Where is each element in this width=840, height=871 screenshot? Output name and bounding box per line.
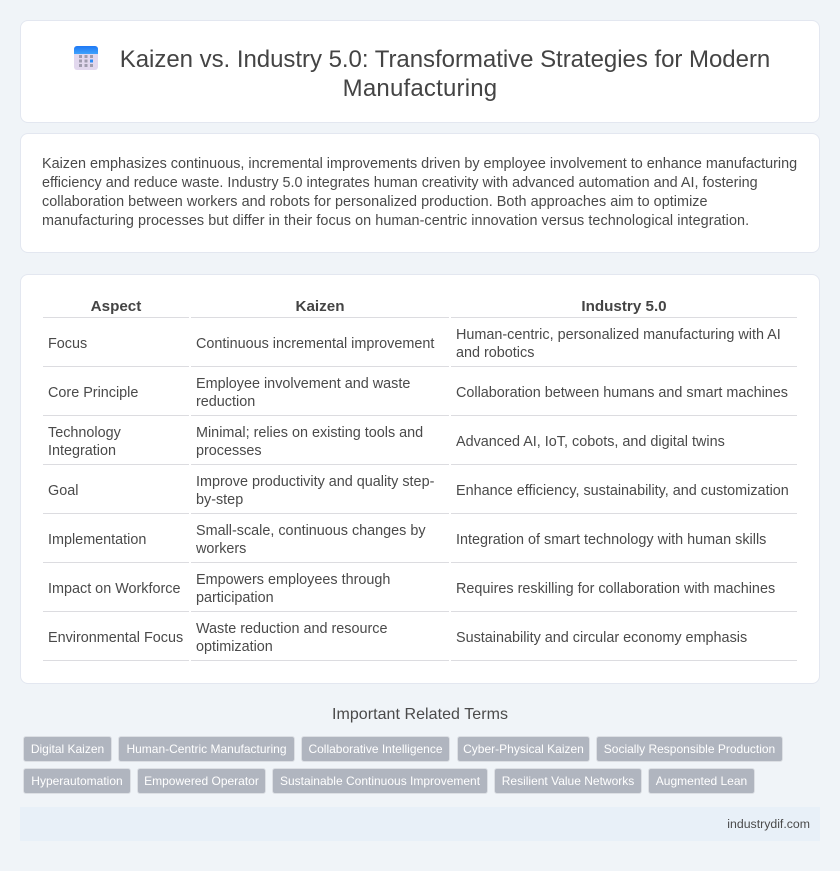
heading: related terms: Important Related Terms (332, 706, 508, 723)
row: Impact on Workforce: participation (196, 590, 274, 606)
tag (118, 736, 295, 762)
tag (23, 736, 112, 762)
tag: Collaborative Intelligence (308, 742, 443, 756)
tag: Sustainable Continuous Improvement (280, 774, 480, 788)
intro text block: efficiency and reduce waste. Industry 5.0 integrates human creativity with advanced automation and AI, fostering (42, 175, 758, 191)
row: Goal: Enhance efficiency, sustainability, and customization (456, 483, 789, 499)
title (120, 46, 770, 102)
column heading: Industry 5.0: Industry 5.0 (581, 298, 667, 315)
row: Technology Integration: Integration (48, 443, 116, 459)
column heading: Aspect: Aspect (91, 298, 141, 315)
icon: calendar (74, 46, 98, 70)
row: Focus: Focus (48, 336, 87, 352)
row: Goal: Goal (48, 483, 78, 499)
row: Core Principle: Core Principle (48, 385, 138, 401)
tag: Socially Responsible Production (604, 742, 775, 756)
tag (596, 736, 783, 762)
tag: Human-Centric Manufacturing (126, 742, 287, 756)
panel: comparison table card (20, 274, 820, 684)
row: Environmental Focus (48, 621, 747, 655)
row: Environmental Focus: Waste reduction and resource (196, 621, 387, 637)
row: Implementation: Small-scale, continuous changes by (196, 523, 426, 539)
row: Technology Integration (48, 425, 725, 459)
panel: intro text card (20, 133, 820, 253)
tag (648, 768, 755, 794)
intro text block: Kaizen emphasizes continuous, incremental improvements driven by employee involvement to enhance manufacturing (42, 156, 797, 172)
row: Focus: Human-centric, personalized manufacturing with AI (456, 327, 781, 343)
row: Core Principle: reduction (196, 394, 255, 410)
intro text block: collaboration between workers and robots for personalized production. Both approaches aim to optimize (42, 194, 708, 210)
tag: Cyber-Physical Kaizen (463, 742, 584, 756)
row: Implementation: Integration of smart technology with human skills (456, 532, 766, 548)
row: Focus: and robotics (456, 345, 534, 361)
row: Technology Integration: Advanced AI, IoT, cobots, and digital twins (456, 434, 725, 450)
row: Goal: by-step (196, 492, 243, 508)
row: Impact on Workforce (48, 572, 775, 606)
tag (137, 768, 266, 794)
row: Technology Integration: Minimal; relies on existing tools and (196, 425, 423, 441)
tag: Hyperautomation (31, 774, 123, 788)
row: Core Principle: Employee involvement and waste (196, 376, 410, 392)
row: Goal: Improve productivity and quality step- (196, 474, 434, 490)
column heading: Kaizen: Kaizen (296, 298, 344, 315)
title: Manufacturing (343, 75, 497, 102)
intro text block (42, 156, 797, 229)
row: Implementation (48, 523, 766, 557)
row: Impact on Workforce: Empowers employees through (196, 572, 390, 588)
tag (301, 736, 450, 762)
footer source text: industrydif.com (727, 817, 810, 831)
row: Environmental Focus: optimization (196, 639, 273, 655)
tag (494, 768, 642, 794)
title: Kaizen vs. Industry 5.0: Transformative Strategies for Modern (120, 46, 770, 73)
row: Implementation: Implementation (48, 532, 146, 548)
row: Environmental Focus: Environmental Focus (48, 630, 183, 646)
row: Focus: Continuous incremental improvement (196, 336, 434, 352)
tag list: related terms (23, 736, 783, 794)
tag (23, 768, 131, 794)
tag (272, 768, 488, 794)
row: Core Principle: Collaboration between humans and smart machines (456, 385, 788, 401)
row: Goal (48, 474, 789, 508)
tag: Augmented Lean (656, 774, 747, 788)
row: Core Principle (48, 376, 788, 410)
row: Technology Integration: Technology (48, 425, 121, 441)
panel: title card (20, 20, 820, 123)
row: Impact on Workforce: Impact on Workforce (48, 581, 180, 597)
footer band (20, 807, 820, 841)
row: Environmental Focus: Sustainability and circular economy emphasis (456, 630, 747, 646)
comparison table (43, 298, 797, 661)
tag: Empowered Operator (144, 774, 259, 788)
row: Impact on Workforce: Requires reskilling for collaboration with machines (456, 581, 775, 597)
intro text block: manufacturing processes but differ in their focus on human-centric innovation versus technological integration. (42, 213, 749, 229)
tag: Resilient Value Networks (502, 774, 634, 788)
row: Implementation: workers (196, 541, 246, 557)
tag: Digital Kaizen (31, 742, 104, 756)
tag (457, 736, 590, 762)
row: Focus (48, 327, 781, 361)
row: Technology Integration: processes (196, 443, 262, 459)
